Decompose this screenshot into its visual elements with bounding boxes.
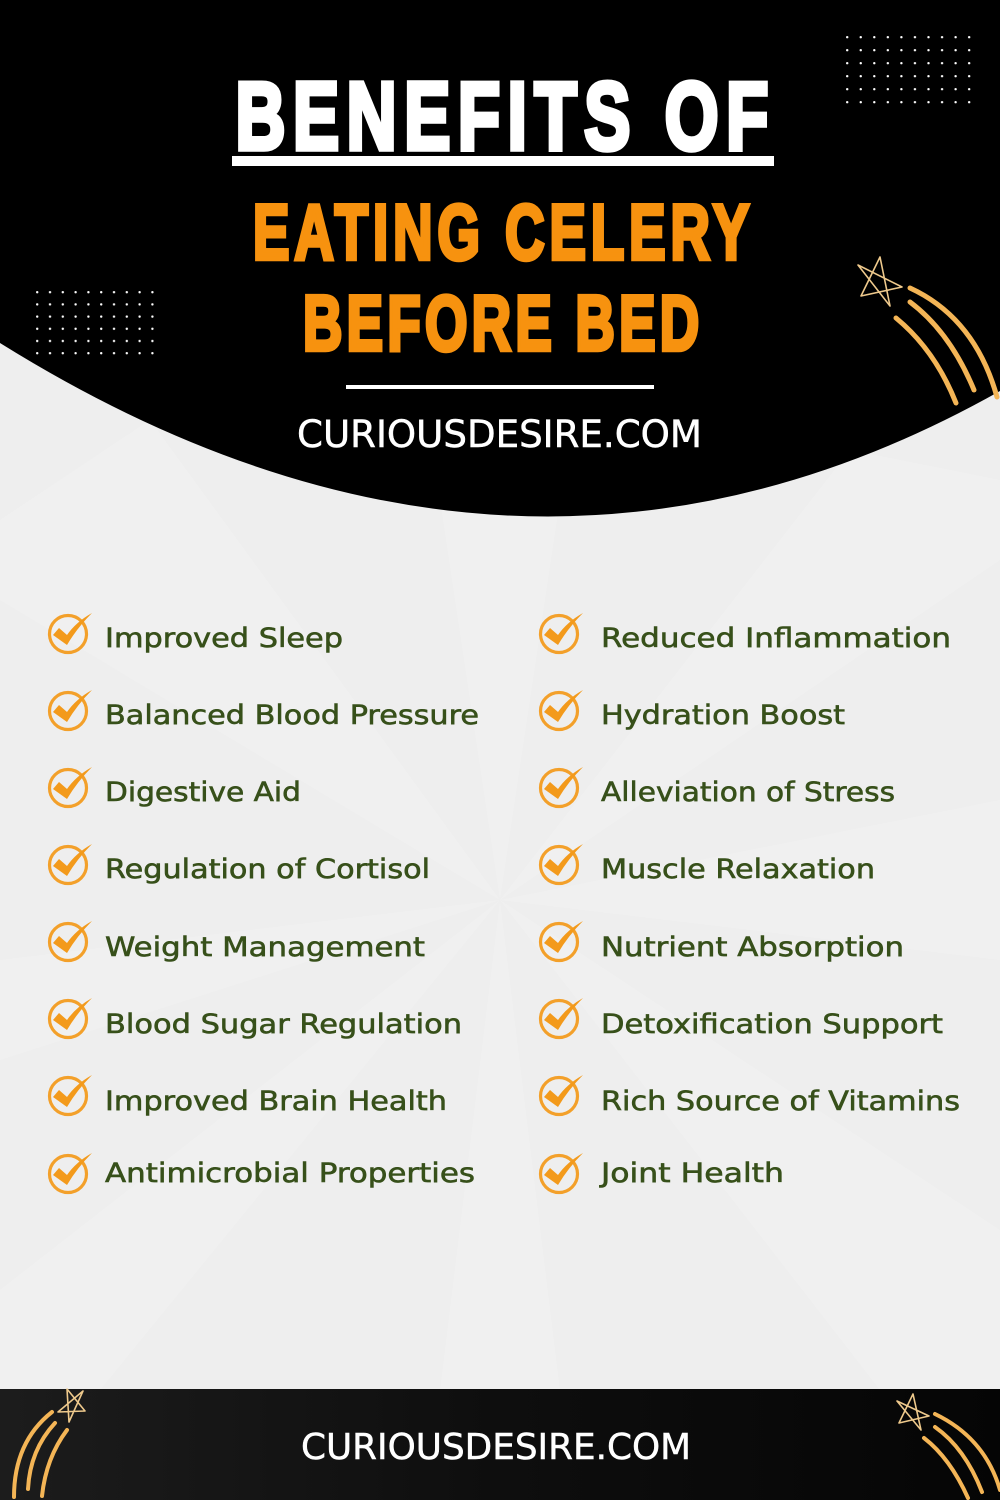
item: hydration boost: Hydration Boost (601, 700, 845, 731)
icon: shooting star header (858, 257, 997, 403)
benefits list: left column (50, 613, 479, 1192)
item: weight management: Weight Management (105, 932, 425, 963)
item: improved sleep: Improved Sleep (105, 623, 343, 654)
item: improved brain health (50, 1075, 447, 1117)
item: blood sugar regulation: Blood Sugar Regulation (105, 1009, 462, 1040)
dot grid top right (846, 36, 971, 104)
item: digestive aid (50, 767, 301, 808)
item: antimicrobial properties (50, 1153, 475, 1192)
item: alleviation of stress (540, 767, 895, 808)
title: benefits of: BENEFITS OF (236, 62, 768, 170)
item: balanced blood pressure: Balanced Blood Pressure (105, 700, 479, 731)
item: muscle relaxation: Muscle Relaxation (601, 854, 875, 885)
title: before bed: BEFORE BED (303, 280, 699, 367)
item: rich source of vitamins (540, 1075, 960, 1117)
icon: shooting star footer left (14, 1389, 85, 1497)
item: detoxification support (540, 998, 943, 1040)
title: eating celery: EATING CELERY (253, 189, 749, 276)
item: reduced inflammation: Reduced Inflammation (601, 623, 951, 654)
footer bar (0, 1389, 1000, 1500)
benefits list: right column (540, 613, 960, 1192)
item: joint health: Joint Health (599, 1158, 784, 1189)
dot grid left (36, 291, 154, 355)
divider line (346, 385, 654, 389)
item: improved brain health: Improved Brain Health (105, 1086, 447, 1117)
item: hydration boost (540, 690, 845, 731)
title underline (232, 156, 774, 166)
item: joint health (540, 1153, 784, 1192)
footer website label: CURIOUSDESIRE.COM (301, 1427, 691, 1468)
item: regulation of cortisol (50, 844, 430, 885)
header black arc (0, 0, 1000, 516)
item: regulation of cortisol: Regulation of Cortisol (105, 854, 430, 885)
item: balanced blood pressure (50, 690, 479, 731)
item: digestive aid: Digestive Aid (105, 777, 301, 808)
item: muscle relaxation (540, 844, 875, 885)
item: nutrient absorption (540, 921, 904, 963)
item: reduced inflammation (540, 613, 951, 654)
item: blood sugar regulation (50, 998, 462, 1040)
item: weight management (50, 921, 425, 963)
icon: shooting star footer right (897, 1394, 1000, 1498)
item: alleviation of stress: Alleviation of Stress (601, 777, 895, 808)
item: improved sleep (50, 613, 343, 654)
website label: CURIOUSDESIRE.COM (297, 413, 702, 456)
item: detoxification support: Detoxification Support (601, 1009, 943, 1040)
item: rich source of vitamins: Rich Source of Vitamins (601, 1086, 960, 1117)
item: nutrient absorption: Nutrient Absorption (601, 932, 904, 963)
item: antimicrobial properties: Antimicrobial Properties (105, 1158, 475, 1189)
